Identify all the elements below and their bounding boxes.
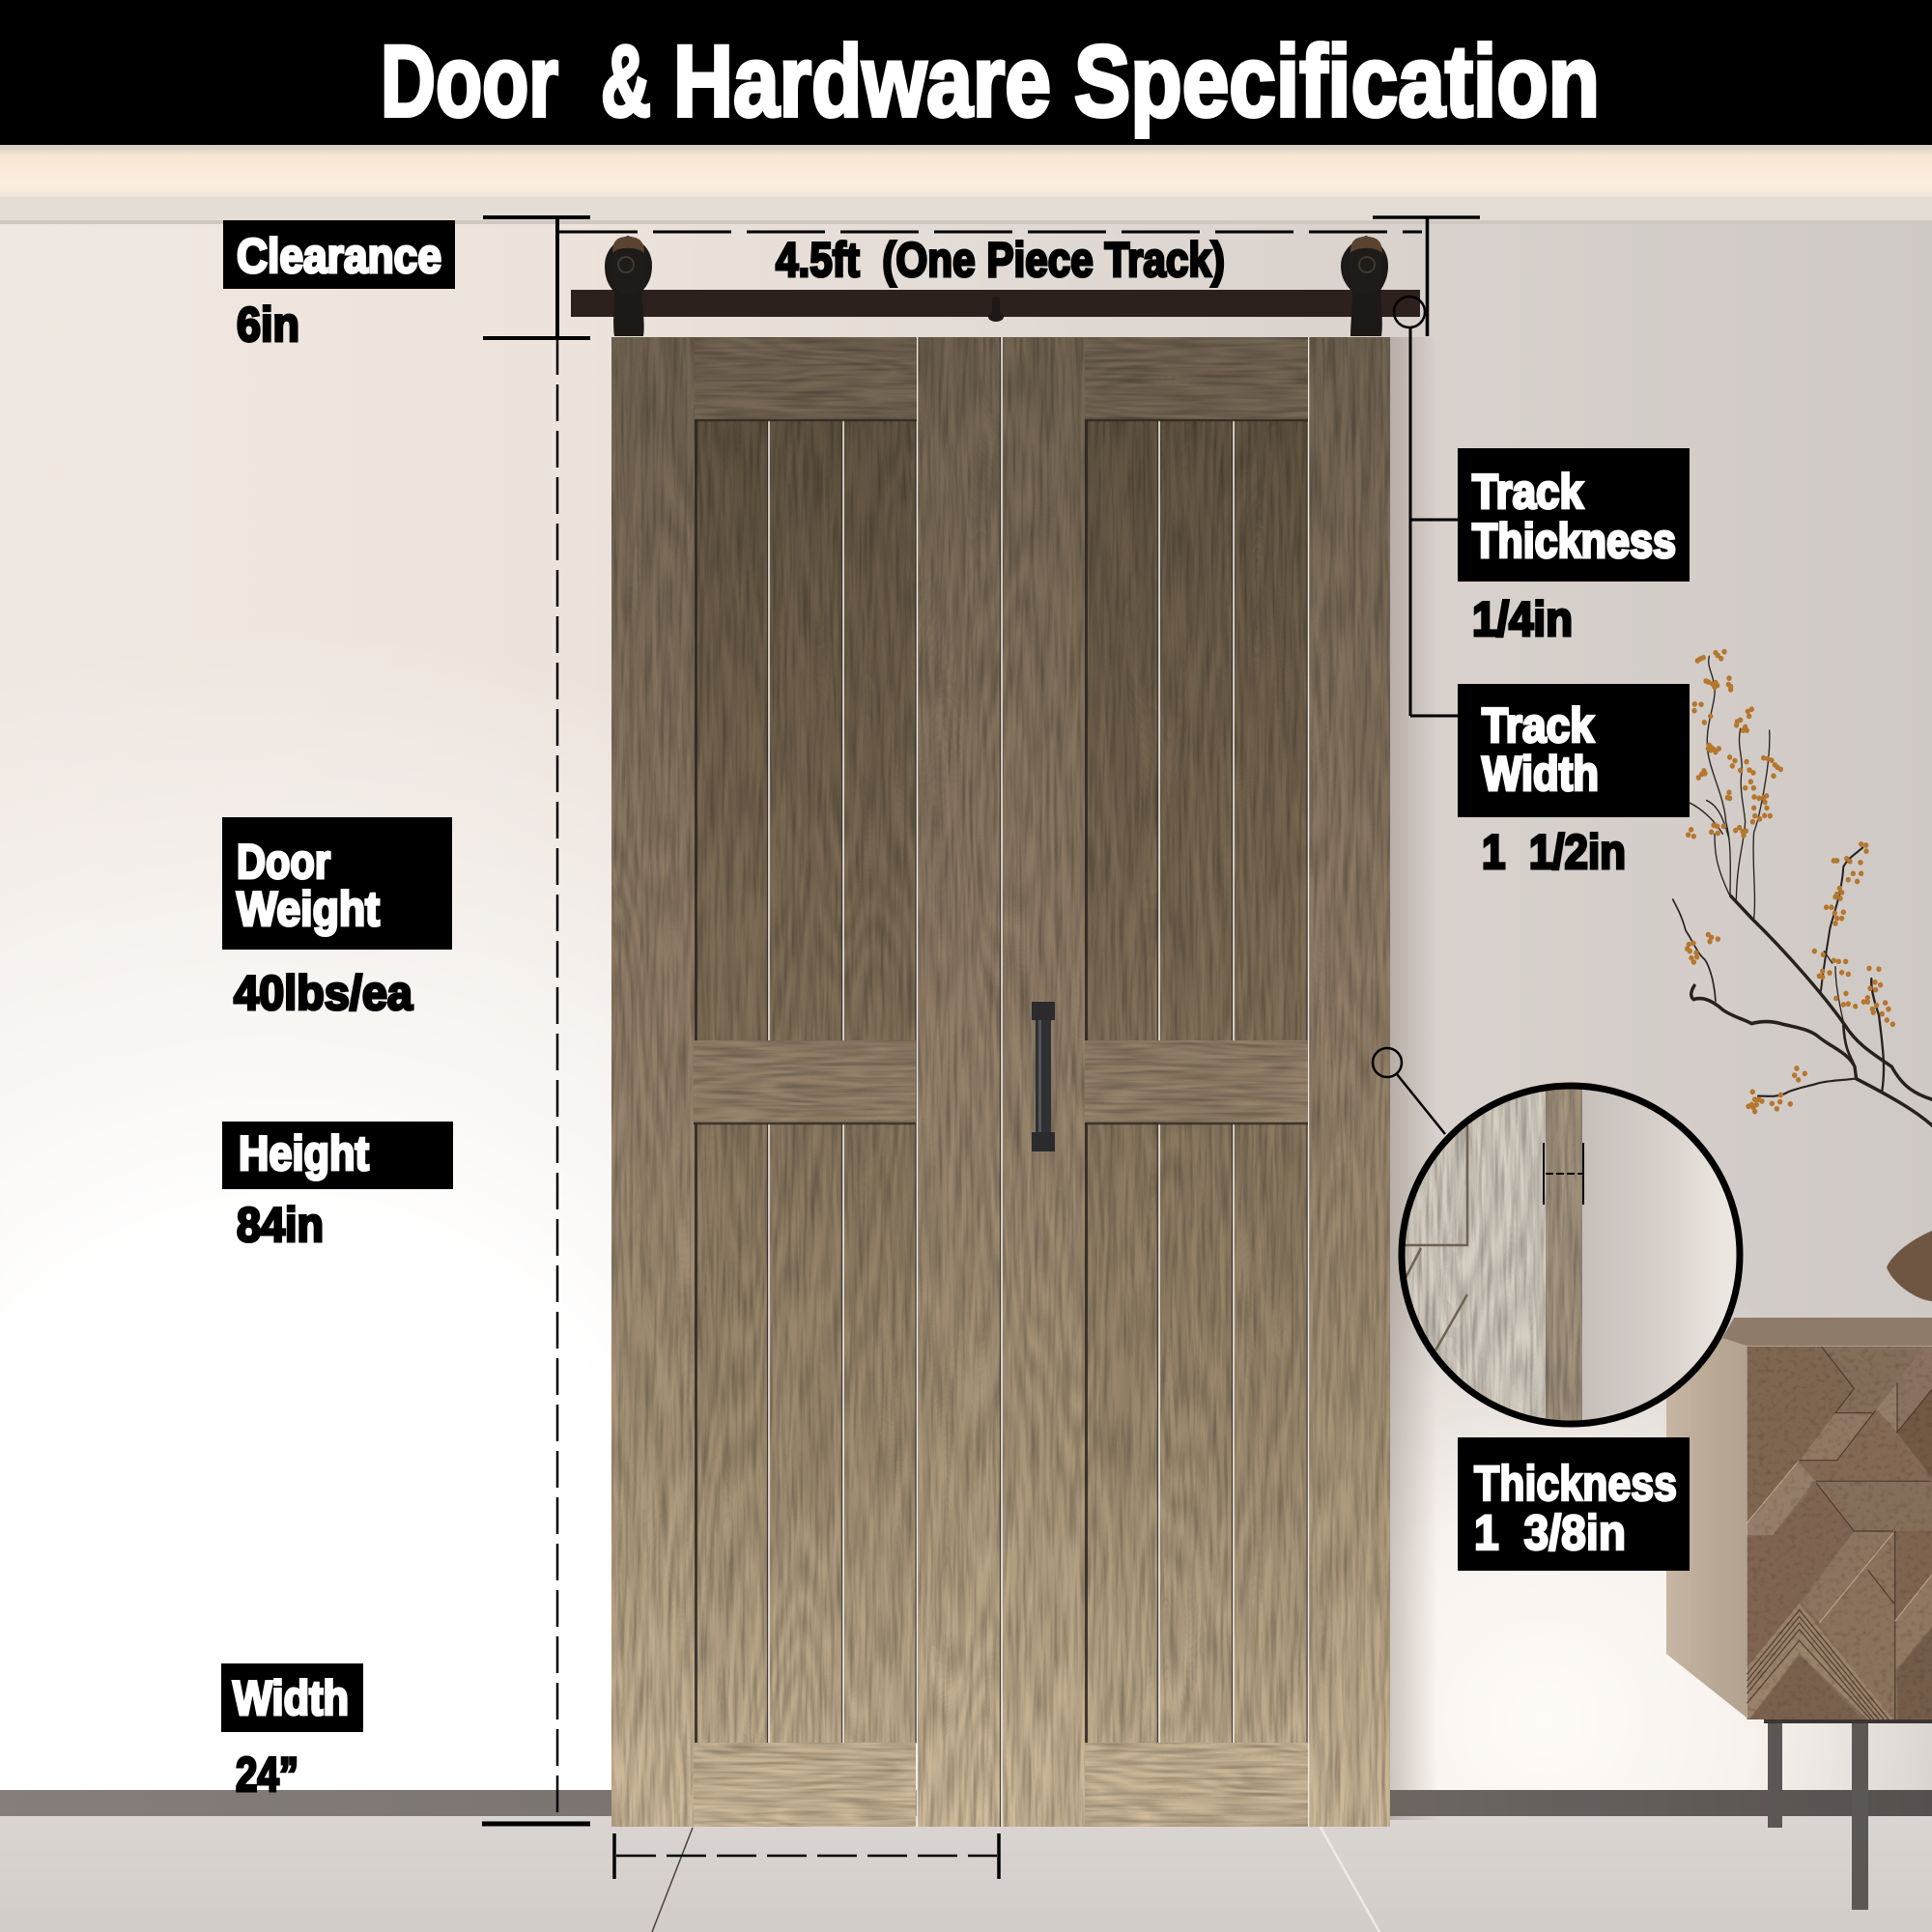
cabinet legs	[1768, 1718, 1868, 1910]
centre stiles	[917, 337, 1085, 1827]
label: track width: Track	[1482, 698, 1594, 753]
label: width	[221, 1663, 363, 1802]
door handle	[1032, 1002, 1055, 1151]
cabinet	[1666, 1318, 1932, 1910]
floor	[0, 1816, 1932, 1932]
cabinet top	[1722, 1318, 1932, 1346]
label: height: 84in	[237, 1198, 324, 1252]
label: track thickness	[1458, 448, 1690, 646]
right hanger	[1341, 236, 1388, 336]
label: door weight: 40lbs/ea	[234, 966, 413, 1020]
door right stile	[1308, 337, 1390, 1827]
label: door weight: Weight	[237, 882, 380, 936]
door left stile	[611, 337, 695, 1827]
title bar	[0, 0, 1932, 145]
left leaf planks	[695, 420, 917, 1744]
dimension lines	[482, 217, 1480, 1879]
vase	[1887, 1231, 1932, 1301]
track callout circle and leader	[1394, 297, 1459, 716]
magnified door edge	[1546, 1083, 1582, 1427]
label: height: Height	[239, 1126, 369, 1180]
decorative branch with berries	[1673, 649, 1932, 1125]
track bar	[571, 290, 1420, 317]
top rails	[695, 337, 1308, 420]
door width dimension	[614, 1833, 999, 1879]
label: door weight	[222, 817, 452, 1020]
track centre bolt	[988, 297, 1004, 322]
track length label: 4.5ft (One Piece Track)	[776, 233, 1225, 287]
baseboard	[0, 1790, 1932, 1817]
label: width: Width	[233, 1671, 349, 1725]
magnified thickness marker	[1544, 1143, 1583, 1205]
label: track thickness: Thickness	[1472, 514, 1676, 568]
label: track width: Width	[1482, 747, 1599, 801]
label: door thickness	[1458, 1437, 1690, 1571]
title: Hardware	[673, 25, 1051, 138]
label: door thickness: 1 3/8in	[1474, 1505, 1626, 1560]
barn door	[611, 337, 1390, 1827]
magnified door face	[1399, 1083, 1546, 1427]
berries	[1685, 649, 1895, 1115]
sliding track	[571, 236, 1420, 336]
label: clearance	[223, 220, 455, 352]
label: track width: 1 1/2in	[1482, 825, 1626, 879]
door shadow on wall	[1390, 337, 1438, 1820]
thickness callout small circle and leader	[1373, 1048, 1445, 1134]
right leaf planks	[1085, 420, 1308, 1744]
label: clearance: Clearance	[237, 229, 441, 283]
label: track thickness: 1/4in	[1472, 592, 1573, 646]
ceiling cove and molding	[0, 145, 1932, 224]
cabinet front pattern	[1747, 1346, 1932, 1719]
label: height	[222, 1122, 453, 1252]
bottom rails	[694, 1743, 1308, 1827]
cabinet side	[1666, 1338, 1747, 1718]
clearance bracket	[483, 217, 590, 338]
label: width: 24”	[236, 1747, 298, 1802]
title: Door	[381, 25, 558, 138]
label: track thickness: Track	[1472, 465, 1583, 519]
left hanger	[605, 236, 652, 336]
label: door thickness: Thickness	[1474, 1456, 1677, 1511]
track length dashed dimension	[559, 230, 1422, 234]
height dashed dimension	[482, 338, 590, 1824]
under-cabinet shadow	[1764, 1718, 1932, 1723]
label: door weight: Door	[237, 835, 330, 889]
rail edges	[694, 420, 1308, 1123]
title: Specification	[1074, 25, 1600, 138]
label: track width	[1458, 684, 1690, 879]
plank gaps	[696, 337, 1308, 1827]
branch stems	[1673, 656, 1932, 1125]
title: &	[601, 25, 651, 138]
middle rails	[694, 1040, 1308, 1123]
thickness magnifier	[1399, 1083, 1743, 1427]
right track bracket	[1373, 217, 1480, 336]
label: clearance: 6in	[237, 298, 299, 352]
